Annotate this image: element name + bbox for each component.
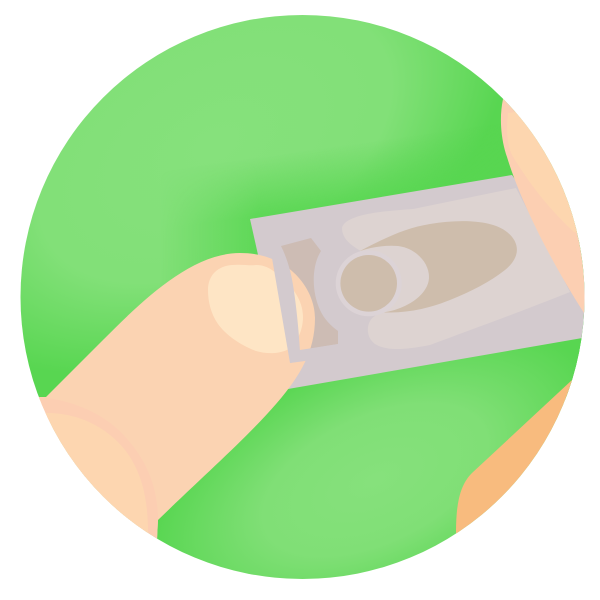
left thumb — [39, 253, 315, 538]
right finger highlight — [515, 112, 577, 232]
card inner disc — [340, 255, 397, 312]
card light band — [342, 188, 570, 349]
card ring — [336, 252, 384, 316]
green background: upper area — [0, 0, 600, 400]
thumb body — [39, 253, 315, 538]
green background: lower area — [50, 333, 582, 579]
card clip strip — [272, 246, 300, 363]
right finger base — [500, 99, 584, 313]
lower right finger — [456, 380, 572, 534]
card brown oval — [360, 221, 517, 313]
card light capsule — [360, 246, 429, 312]
card tan window — [281, 238, 338, 352]
thumb knuckle pad — [46, 414, 146, 532]
green shading above card — [181, 149, 584, 400]
card body — [250, 175, 600, 389]
thumb knuckle ring — [39, 398, 158, 538]
card — [250, 175, 600, 389]
clip lower corner — [290, 345, 330, 363]
thumbnail — [208, 265, 303, 353]
right finger — [500, 99, 584, 313]
